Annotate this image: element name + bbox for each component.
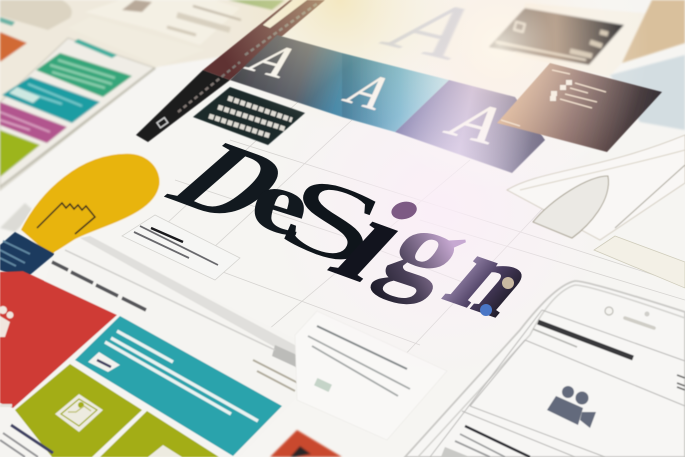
sheet: cream note: [85, 0, 240, 45]
n light dots: [480, 277, 514, 316]
red icon: [0, 306, 14, 337]
chip grey: [0, 203, 35, 232]
Design wordmark: [141, 123, 562, 335]
cream strip: [263, 0, 307, 28]
note lines: [317, 326, 407, 369]
keyboard keys: [209, 98, 292, 136]
lower lines: [465, 426, 530, 457]
sheet edge: [0, 68, 155, 187]
slate block: [230, 35, 342, 117]
phone mockup: [405, 281, 685, 457]
dark list card: [497, 63, 662, 152]
grey hairline: [65, 250, 275, 350]
letter A on slate: A: [234, 35, 317, 86]
light bulb: [0, 153, 160, 279]
letter A on teal: A: [332, 64, 408, 119]
teal bar small: [0, 17, 15, 26]
speaker: [625, 318, 654, 328]
screen lines: [496, 42, 586, 60]
map card: [610, 55, 685, 130]
list lines: [501, 70, 606, 126]
lime block right: [100, 411, 219, 457]
header bar: [538, 322, 633, 358]
green lines: [50, 60, 115, 88]
screen panel: [462, 340, 685, 457]
magenta block: [0, 102, 67, 143]
Design wordmark: e: [240, 146, 322, 258]
screen icon: [514, 22, 525, 32]
small note: [122, 215, 240, 280]
lime icon: [148, 445, 182, 457]
teal label: [88, 352, 120, 372]
bulb base: [0, 232, 55, 279]
base threads: [0, 241, 30, 266]
phone inner edge: [418, 285, 685, 457]
inner curve: [520, 150, 685, 190]
Design wordmark: g: [362, 186, 497, 311]
dark screen: [489, 8, 624, 65]
page grid lines: [150, 100, 685, 360]
pink glow behind wordmark: [270, 40, 610, 380]
Design wordmark: n: [425, 220, 562, 335]
diagonal paper edge: [615, 165, 685, 228]
grey thumbnail: [122, 0, 152, 12]
orange red card: [270, 430, 342, 457]
blurred layouts, top left: [0, 0, 320, 232]
teal block: [75, 316, 282, 456]
large layout sheet, bottom left: [0, 236, 335, 457]
green block: [36, 53, 132, 97]
green header top: [228, 0, 285, 10]
phone body: [405, 281, 685, 457]
orange block: [0, 32, 27, 62]
upper tablet card: [489, 3, 667, 77]
lime block: [0, 130, 40, 177]
teal block: [342, 53, 449, 132]
right note: [295, 311, 447, 440]
toolbar icon: [157, 118, 168, 128]
filament: [37, 203, 95, 234]
magenta lines: [0, 112, 50, 132]
Design wordmark: S: [263, 150, 402, 292]
video camera icon: [547, 386, 596, 428]
main layout sheet: [0, 38, 155, 190]
dark toolbar strip: [136, 0, 325, 142]
wood surface: [622, 0, 685, 63]
shoe cut-out card: [507, 135, 685, 240]
red block: [0, 271, 117, 408]
sheet: back layouts: [0, 0, 320, 190]
letter A on purple: A: [433, 91, 527, 154]
dashes: [52, 262, 146, 310]
sub bar: [533, 329, 577, 347]
sheet: beige tablet: [0, 0, 72, 30]
typography colour band: [230, 35, 545, 173]
grey header band: [80, 236, 308, 372]
list bullets: [550, 80, 572, 101]
teal lines: [20, 84, 82, 106]
Design wordmark: D: [141, 123, 321, 241]
image icon: [55, 394, 103, 432]
purple block: [395, 80, 545, 173]
bottom-left lines: [11, 425, 53, 453]
lens flare: [0, 0, 685, 300]
teal block: [2, 77, 100, 123]
lime block left: [15, 364, 142, 457]
note lines: [151, 228, 183, 242]
toolbar glyphs: [178, 3, 318, 112]
screen buttons: [570, 32, 608, 56]
bulb glass: [20, 153, 160, 256]
screen frame: [430, 310, 685, 457]
teal lines: [105, 331, 258, 421]
brown strip: [203, 0, 325, 80]
grey shape: [533, 176, 608, 238]
sheet: cream panel: [68, 17, 205, 68]
Design wordmark: i: [302, 175, 449, 306]
teal header bar: [74, 39, 117, 58]
note lines: [167, 6, 241, 35]
side lines: [677, 375, 685, 390]
keyboard card: [193, 87, 305, 145]
right-side rectangle: [594, 236, 685, 288]
camera dots: [605, 307, 613, 315]
side lines: [253, 360, 300, 391]
grey box: [272, 345, 308, 368]
